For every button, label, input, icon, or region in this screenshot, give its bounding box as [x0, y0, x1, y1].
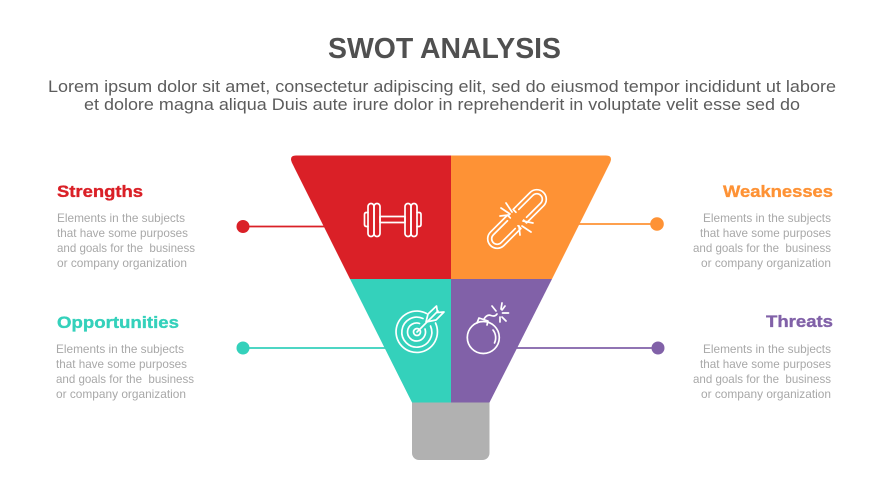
icon: dumbbell	[364, 204, 421, 236]
panel: threats	[693, 313, 833, 401]
panel: weaknesses: Elements in the subjects	[703, 211, 831, 225]
panel: opportunities	[56, 314, 194, 401]
panel: strengths: Elements in the subjects	[57, 211, 185, 225]
panel: strengths	[57, 183, 195, 270]
panel: opportunities: that have some purposes	[56, 357, 187, 371]
panel: threats: and goals for the business	[693, 372, 831, 386]
panel: strengths: Strengths	[57, 183, 143, 201]
panel: weaknesses: or company organization	[701, 256, 831, 270]
panel: opportunities: or company organization	[56, 387, 186, 401]
panel: opportunities: Elements in the subjects	[56, 342, 184, 356]
connector: strengths	[236, 220, 326, 233]
segment: strengths	[291, 156, 451, 279]
connector: weaknesses	[577, 217, 664, 231]
panel: strengths: that have some purposes	[57, 226, 188, 240]
panel: opportunities: and goals for the business	[56, 372, 194, 386]
panel: strengths: and goals for the business	[57, 241, 195, 255]
icon: target with arrow	[396, 306, 444, 352]
icon: broken chain	[484, 186, 550, 252]
subtitle text: et dolore magna aliqua Duis aute irure dolor in reprehenderit in voluptate velit esse sed do	[84, 95, 800, 114]
panel: threats: Threats	[766, 313, 833, 331]
panel: opportunities: Opportunities	[57, 314, 179, 332]
panel: strengths: or company organization	[57, 256, 187, 270]
icon: bomb	[467, 303, 508, 354]
panel: weaknesses	[693, 183, 833, 270]
connector: threats	[515, 342, 664, 354]
funnel	[291, 156, 611, 460]
subtitle text: Lorem ipsum dolor sit amet, consectetur adipiscing elit, sed do eiusmod tempor incididunt ut labore	[48, 77, 836, 96]
panel: threats: or company organization	[701, 387, 831, 401]
panel: weaknesses: Weaknesses	[723, 183, 833, 201]
panel: weaknesses: that have some purposes	[700, 226, 831, 240]
segment: weaknesses	[451, 156, 611, 279]
title: SWOT ANALYSIS	[328, 33, 561, 65]
subtitle text	[48, 77, 836, 114]
panel: threats: Elements in the subjects	[703, 342, 831, 356]
segment: opportunities	[350, 279, 451, 402]
panel: threats: that have some purposes	[700, 357, 831, 371]
panel: weaknesses: and goals for the business	[693, 241, 831, 255]
funnel stem	[412, 402, 490, 460]
segment: threats	[451, 279, 552, 402]
connector: opportunities	[236, 342, 387, 354]
